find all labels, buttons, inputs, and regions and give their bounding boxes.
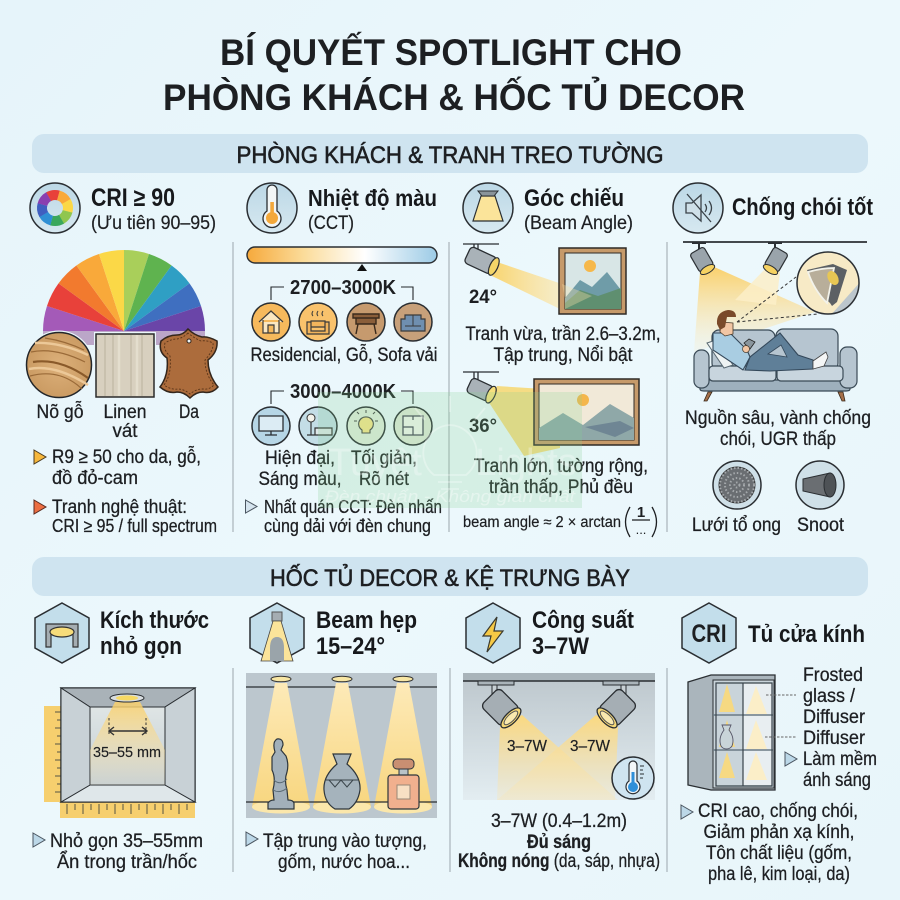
icon: warm sofa <box>299 303 337 341</box>
label: frosted glass: glass / <box>803 686 856 707</box>
label: linen <box>104 402 146 442</box>
caption: wattage: 3–7W (0.4–1.2m) <box>491 811 627 832</box>
bullet: soften light: Làm mềm <box>803 749 877 770</box>
heading: glass cabinet: Tủ cửa kính <box>748 621 865 648</box>
bullet: art CRI: Tranh nghệ thuật: <box>52 497 187 518</box>
heading: narrow beam: Beam hẹp <box>316 607 417 634</box>
bullet: cabinet benefits: Tôn chất liệu (gốm, <box>706 843 852 864</box>
icon: CRI hexagon: CRI <box>692 620 726 648</box>
bullet: R9: đồ đỏ-cam <box>52 468 138 489</box>
heading: wattage <box>532 607 634 660</box>
icon: snoot <box>796 461 844 509</box>
icon: ceiling cone <box>463 183 513 233</box>
title: PHÒNG KHÁCH & HỐC TỦ DECOR <box>163 76 745 118</box>
caption: wattage: Không nóng (da, sáp, nhựa) <box>458 851 660 872</box>
diagram: display shelf with objects <box>246 673 437 818</box>
icon: CRI hexagon <box>682 603 736 663</box>
bullet: compact: Ẩn trong trần/hốc <box>57 851 197 873</box>
heading: anti glare: Chống chói tốt <box>732 194 873 221</box>
bullet: consistent CCT: Nhất quán CCT: Đèn nhấn <box>264 497 442 517</box>
formula: beam angle <box>463 504 656 537</box>
caption: anti glare <box>685 408 871 450</box>
heading: CCT: Nhiệt độ màu <box>308 185 437 211</box>
icon: thermometer <box>247 183 297 233</box>
label: frosted glass <box>803 665 866 728</box>
icon: recessed light hexagon <box>35 603 89 663</box>
caption: minimal: Rõ nét <box>359 469 410 490</box>
diagram: niche with rulers <box>44 688 195 818</box>
icon: house <box>252 303 290 341</box>
heading: compact size: Kích thước <box>100 607 209 634</box>
formula: beam angle: beam angle ≈ 2 × arctan <box>463 514 621 531</box>
bullet: soften light: ánh sáng <box>803 770 871 791</box>
section banner: cabinet niche: HỐC TỦ DECOR & KỆ TRƯNG BÀY <box>270 563 630 592</box>
heading: narrow beam <box>316 607 417 660</box>
formula: beam angle: ... <box>636 522 646 537</box>
watermark: Tuyệt <box>328 442 422 484</box>
subheading: CRI: (Ưu tiên 90–95) <box>91 213 216 234</box>
heading: CRI: CRI ≥ 90 <box>91 184 175 212</box>
chart: rainbow spectrum fan <box>43 250 205 345</box>
icon: bedroom lamp <box>299 407 337 445</box>
bullet: focus on objects: Tập trung vào tượng, <box>263 831 427 852</box>
caption: minimal: Tối giản, <box>351 448 417 469</box>
label: snoot: Snoot <box>797 515 845 536</box>
icon: colour wheel <box>30 183 80 233</box>
heading: narrow beam: 15–24° <box>316 633 385 660</box>
heading: beam angle: Góc chiếu <box>524 185 624 212</box>
caption: large painting: Tranh lớn, tường rộng, <box>474 456 648 477</box>
panel: CRI <box>24 183 218 536</box>
caption: modern: Hiện đại, <box>265 448 335 469</box>
caption: medium painting <box>466 324 660 366</box>
caption: medium painting: Tranh vừa, trần 2.6–3.2m, <box>466 324 660 345</box>
perfume bottle <box>388 759 419 809</box>
caption: anti glare: chói, UGR thấp <box>720 429 836 450</box>
section banner: cabinet niche <box>32 557 868 596</box>
diagram: niche with rulers: 35–55 mm <box>93 744 161 761</box>
detail: anti-glare rim <box>797 252 862 320</box>
range label: 2700-3000K: 2700–3000K <box>290 277 397 299</box>
icon: muted speaker <box>673 183 723 233</box>
icon: fabric sofa <box>394 303 432 341</box>
caption: wattage: Đủ sáng <box>527 832 591 853</box>
bullet: cabinet benefits <box>681 801 858 885</box>
bullet: art CRI: CRI ≥ 95 / full spectrum <box>52 516 217 536</box>
watermark: Lights <box>475 442 577 484</box>
icon: floor plan <box>394 407 432 445</box>
material: leather <box>160 329 218 398</box>
diagram: person on sofa under spotlights <box>683 242 867 401</box>
section banner: living room: PHÒNG KHÁCH & TRANH TREO TƯỜNG <box>236 142 664 169</box>
diagram: glass cabinet <box>688 675 797 790</box>
person <box>707 310 828 371</box>
label: 24 degrees: 24° <box>469 287 497 308</box>
panel: anti glare <box>673 183 873 536</box>
panel: wattage <box>458 603 660 872</box>
material: linen <box>94 332 156 399</box>
caption: medium painting: Tập trung, Nổi bật <box>494 345 633 366</box>
label: 36 degrees: 36° <box>469 416 497 437</box>
heading: wattage: Công suất <box>532 607 634 634</box>
statue <box>268 739 294 809</box>
heading: compact size: nhỏ gọn <box>100 633 182 660</box>
icon: lightning hexagon <box>466 603 520 663</box>
watermark: Đèn chuẩn - Không gian chất <box>325 487 576 506</box>
panel: narrow beam <box>246 603 437 873</box>
watermark <box>318 392 582 508</box>
caption: wattage <box>458 811 660 872</box>
icon: wooden table <box>347 303 385 341</box>
label: leather: Da <box>179 402 199 423</box>
panel: beam angle <box>463 183 660 537</box>
label: frosted glass: Diffuser <box>803 707 866 728</box>
section banner: living room <box>32 134 868 173</box>
heading: wattage: 3–7W <box>532 633 589 660</box>
bullet: art CRI <box>34 497 217 536</box>
label: frosted glass: Frosted <box>803 665 863 686</box>
label: wood: Nõ gỗ <box>36 401 84 423</box>
bullet: R9 <box>34 446 201 489</box>
subheading: CCT: (CCT) <box>308 213 354 234</box>
range label: 3000-4000K: 3000–4000K <box>290 381 397 403</box>
icon: cool thermometer <box>612 757 654 799</box>
caption: large painting: trần thấp, Phủ đều <box>489 477 633 498</box>
caption: warm uses: Residencial, Gỗ, Sofa vải <box>250 344 438 366</box>
diagram: 24 degree spotlight on painting <box>463 244 626 314</box>
caption: anti glare: Nguồn sâu, vành chống <box>685 408 871 429</box>
icon: light bulb <box>347 407 385 445</box>
bullet: soften light <box>785 749 877 791</box>
diagram: two spotlights: 3–7W <box>507 738 548 755</box>
subheading: beam angle: (Beam Angle) <box>524 213 633 234</box>
label: linen: vát <box>112 421 138 442</box>
label: honeycomb: Lưới tổ ong <box>692 515 781 536</box>
bullet: consistent CCT <box>246 497 442 536</box>
panel: colour temperature <box>246 183 442 536</box>
bullet: cabinet benefits: Giảm phản xạ kính, <box>704 822 854 843</box>
panel: compact size <box>33 603 209 873</box>
bullet: consistent CCT: cùng dải với đèn chung <box>264 516 431 536</box>
panel: glass cabinet <box>681 603 877 885</box>
icon: honeycomb grid <box>713 461 761 509</box>
diagram: two spotlights: 3–7W <box>570 738 611 755</box>
bullet: R9: R9 ≥ 50 cho da, gỗ, <box>52 446 201 468</box>
label: linen: Linen <box>104 402 146 423</box>
caption: modern: Sáng màu, <box>258 469 342 490</box>
bullet: compact: Nhỏ gọn 35–55mm <box>50 831 203 852</box>
caption: modern <box>258 448 342 490</box>
icon: narrow beam hexagon <box>250 603 304 663</box>
bullet: cabinet benefits: CRI cao, chống chói, <box>698 801 858 822</box>
title <box>163 32 745 118</box>
bullet: focus on objects <box>246 831 427 873</box>
vase <box>324 754 360 809</box>
label: diffuser: Diffuser <box>803 728 866 749</box>
diagram: 36 degree spotlight on painting <box>463 372 639 456</box>
bullet: focus on objects: gốm, nước hoa... <box>278 852 410 873</box>
colour temperature bar <box>247 247 437 271</box>
title: BÍ QUYẾT SPOTLIGHT CHO <box>220 32 682 73</box>
caption: minimal <box>351 448 417 490</box>
caption: large painting <box>474 456 648 498</box>
bullet: compact <box>33 831 203 873</box>
formula: beam angle: 1 <box>637 504 645 521</box>
material: wood <box>24 330 94 400</box>
diagram: two spotlights <box>463 673 655 800</box>
icon: television <box>252 407 290 445</box>
sofa <box>694 329 857 401</box>
bullet: cabinet benefits: pha lê, kim loại, da) <box>708 864 850 885</box>
heading: compact size <box>100 607 209 660</box>
